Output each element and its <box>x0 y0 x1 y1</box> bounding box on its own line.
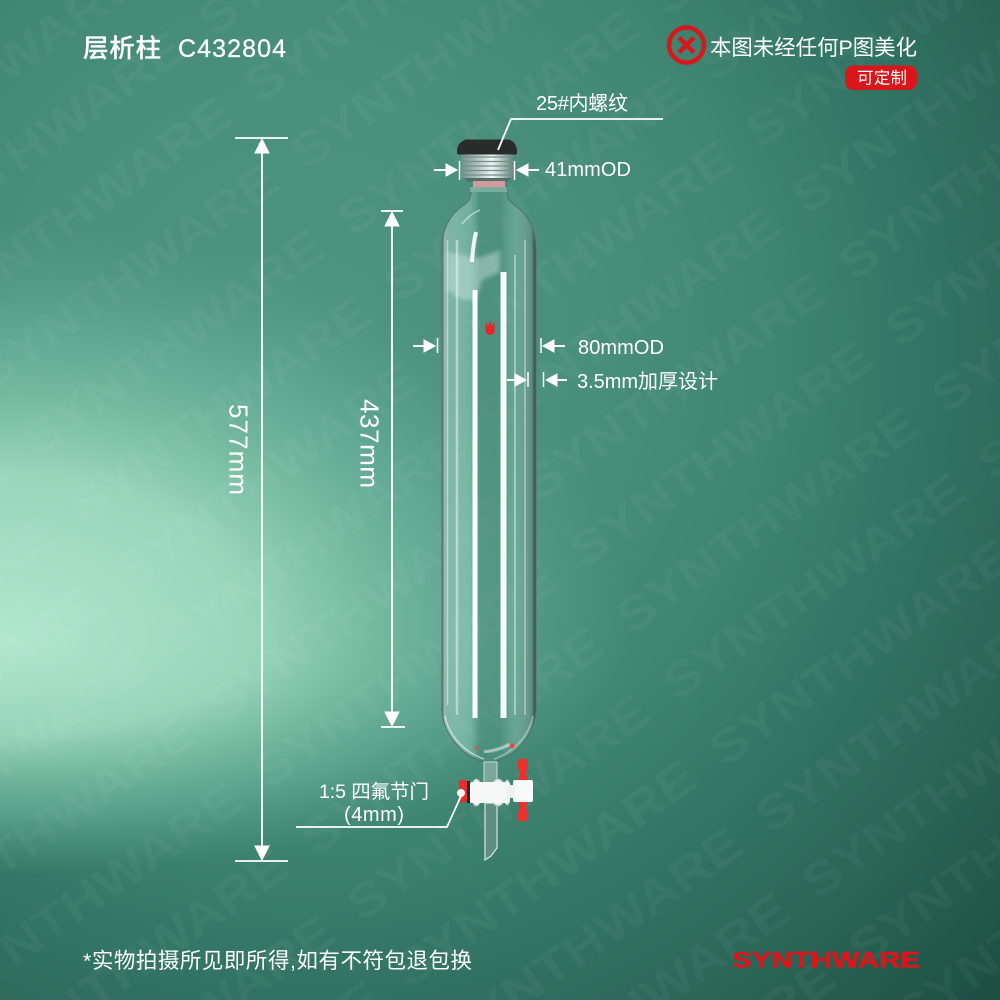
footer note: *实物拍摄所见即所得,如有不符包退包换 <box>83 949 472 973</box>
neck width arrows <box>434 161 539 180</box>
label: stopcock: (4mm) <box>344 804 404 826</box>
body width arrows <box>413 338 565 353</box>
PTFE stopcock <box>457 759 533 821</box>
base residue marks <box>475 744 514 750</box>
label: thread: 25#内螺纹 <box>536 92 628 115</box>
cloudy reflection <box>447 250 500 300</box>
customizable badge <box>845 66 917 90</box>
glass chromatography column <box>442 140 536 860</box>
customizable badge: 可定制 <box>857 68 907 88</box>
title: 层析柱 <box>83 35 161 63</box>
brand logo: SYNTHWARE <box>732 948 920 972</box>
no-retouch notice <box>669 28 917 62</box>
label: body diameter: 80mmOD <box>578 337 664 359</box>
height dimension 577mm <box>235 138 288 861</box>
column body <box>442 186 536 762</box>
label: 437mm: 437mm <box>354 399 384 488</box>
lower stem <box>485 803 497 860</box>
label: 577mm: 577mm <box>224 404 254 495</box>
notice text: 本图未经任何P图美化 <box>710 36 917 60</box>
title: C432804 <box>178 35 286 63</box>
inner tube highlights <box>445 210 533 759</box>
stopcock leader line <box>296 796 461 827</box>
title <box>83 35 286 63</box>
label: neck: 41mmOD <box>545 159 631 181</box>
thread neck <box>461 152 514 192</box>
upper stem <box>484 762 497 783</box>
label: stopcock: 1:5 四氟节门 <box>319 781 429 803</box>
height dimension 437mm <box>381 211 405 727</box>
label: stopcock <box>319 781 429 826</box>
label: wall thickness: 3.5mm加厚设计 <box>577 370 718 393</box>
icon: red cross circle <box>669 28 704 62</box>
red logo mark <box>486 321 494 335</box>
thread leader line <box>498 119 663 150</box>
black cap <box>457 140 517 155</box>
wall thickness arrows <box>507 372 567 387</box>
